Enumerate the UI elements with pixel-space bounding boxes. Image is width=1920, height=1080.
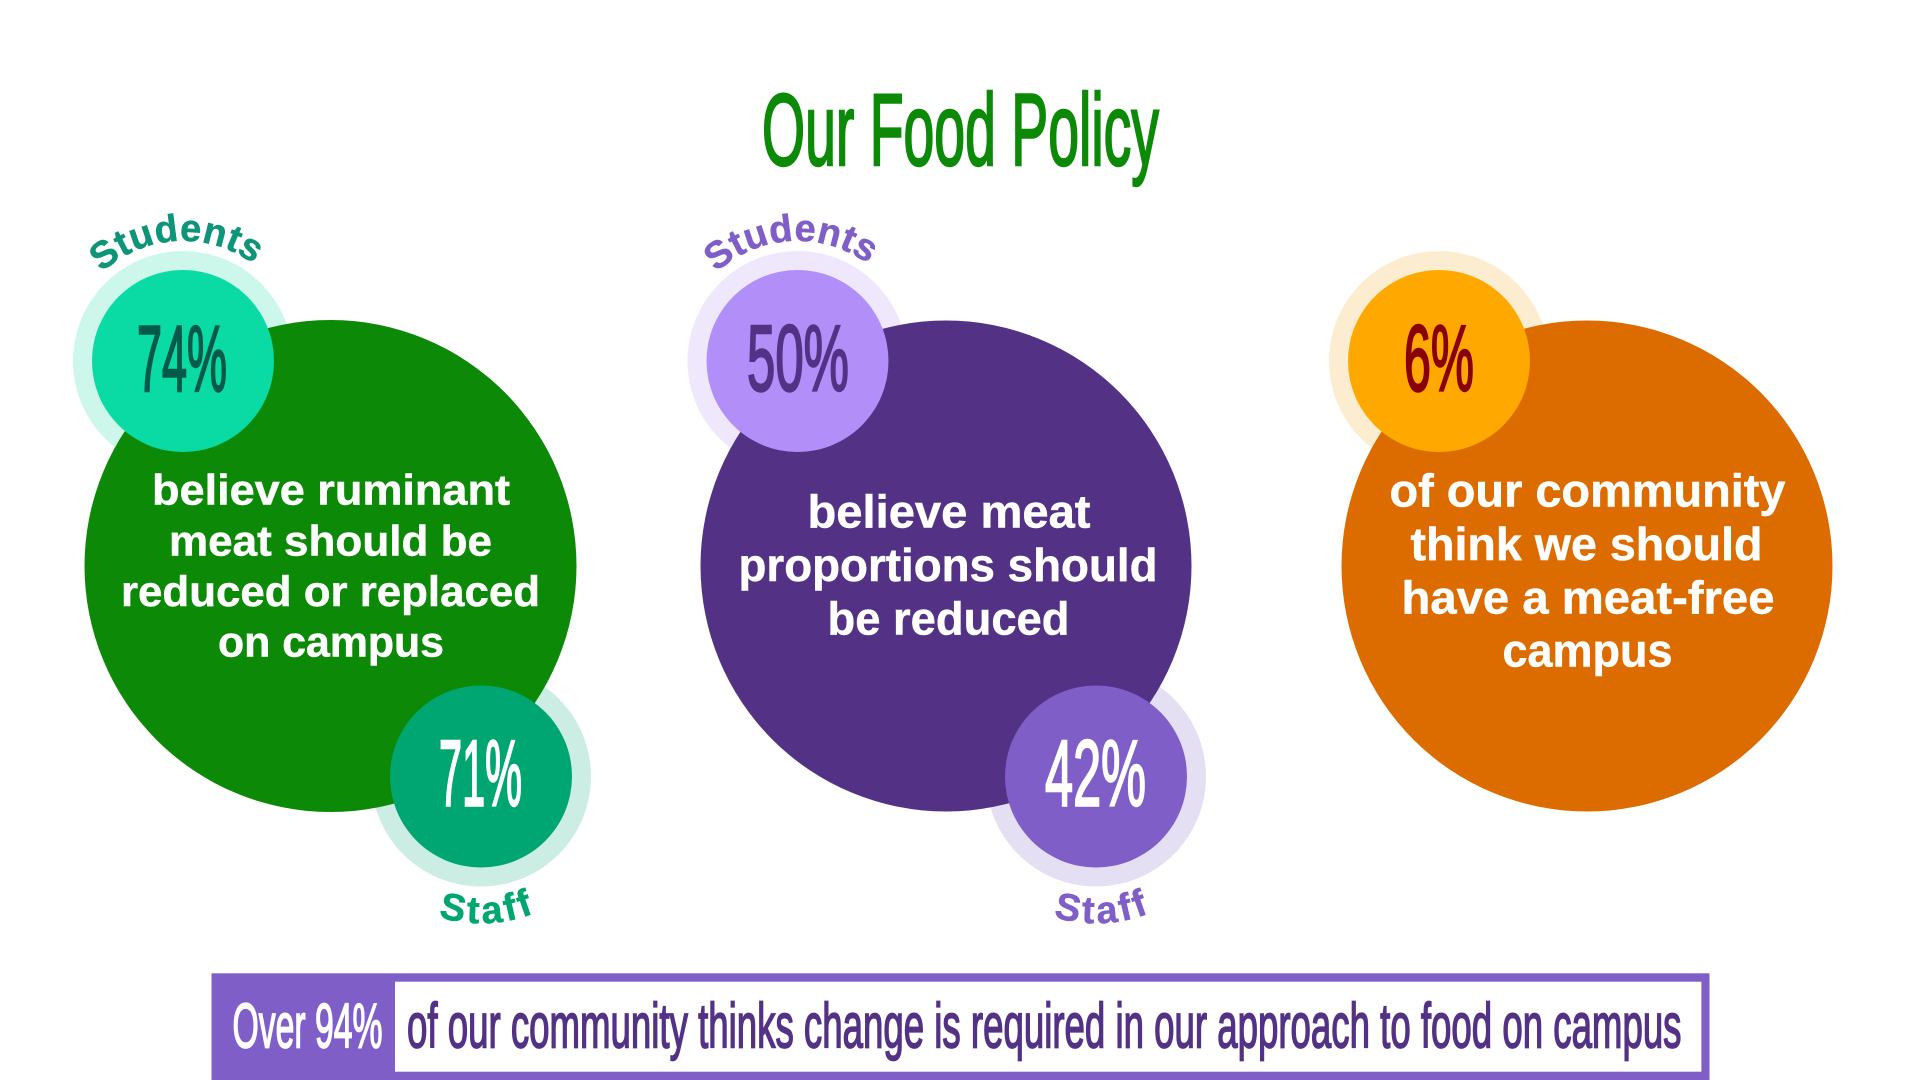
students badge <box>706 270 888 452</box>
staff halo <box>986 666 1206 886</box>
staff label: Staff <box>1055 887 1146 924</box>
students halo <box>73 251 293 471</box>
students halo <box>688 251 908 471</box>
callout figure: Over 94% <box>232 991 382 1061</box>
panel: meat proportions <box>688 213 1206 924</box>
statement text: believe meat <box>808 486 1090 538</box>
staff badge <box>1005 686 1187 868</box>
statement text: think we should <box>1410 518 1762 570</box>
statement text: on campus <box>218 618 444 666</box>
statement text: proportions should <box>738 539 1158 591</box>
students label: Students <box>704 213 876 268</box>
badge <box>1348 270 1530 452</box>
badge: 6% <box>1404 306 1474 410</box>
students badge: 74% <box>137 306 227 411</box>
staff badge <box>390 686 572 868</box>
halo <box>1329 251 1549 471</box>
main circle <box>1342 320 1832 812</box>
panel: meat-free campus <box>1329 251 1832 812</box>
statement text: of our community <box>1390 465 1786 517</box>
statement text <box>1390 465 1786 677</box>
staff halo <box>371 666 591 886</box>
statement text: campus <box>1502 625 1672 677</box>
main circle <box>84 320 576 812</box>
statement text <box>738 486 1158 644</box>
statement text: be reduced <box>828 592 1070 644</box>
callout bar <box>212 973 1710 1080</box>
staff label: Staff <box>440 887 531 924</box>
main circle <box>700 320 1192 812</box>
statement text: meat should be <box>169 517 492 565</box>
title: Our Food Policy <box>762 73 1159 187</box>
statement text <box>121 466 540 666</box>
statement text: believe ruminant <box>152 466 510 514</box>
statement text: reduced or replaced <box>121 568 540 616</box>
staff badge: 42% <box>1045 721 1146 826</box>
students label: Students <box>90 213 261 268</box>
students badge: 50% <box>747 306 849 411</box>
staff badge: 71% <box>439 721 522 826</box>
panel: ruminant meat <box>73 213 591 924</box>
statement text: have a meat-free <box>1402 571 1774 623</box>
students badge <box>92 270 274 452</box>
